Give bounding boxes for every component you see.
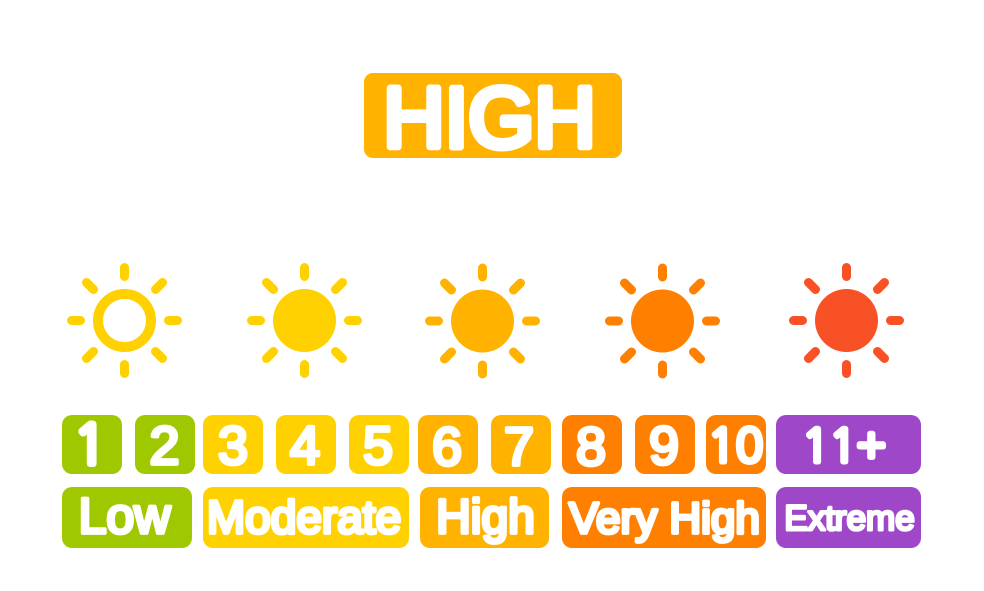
category label: High: High: [436, 491, 535, 544]
index tile 7: 7: [504, 417, 534, 477]
index tile 3: 3: [218, 416, 248, 476]
index tile 6: 6: [432, 417, 462, 477]
index tile 2: 2: [149, 416, 180, 476]
index tile 4: 4: [290, 416, 320, 476]
category label: Very High: Very High: [569, 494, 760, 543]
icon: moderate sun: [252, 268, 358, 374]
index tile 9: 9: [649, 416, 679, 476]
index tile 11+: [776, 415, 921, 474]
category label: High: [420, 487, 549, 548]
index tile 3: [203, 415, 263, 476]
index tile 1: 1: [74, 418, 106, 472]
category label: Extreme: [776, 487, 921, 548]
index tile 5: 5: [363, 416, 393, 476]
icon: very high sun: [610, 268, 716, 374]
index tile 10: 10: [708, 423, 763, 469]
current level badge: HIGH: HIGH: [383, 71, 596, 166]
icon: high sun: [430, 268, 536, 374]
icon: low sun (outlined): [72, 268, 178, 374]
category label: Low: Low: [79, 488, 171, 544]
index tile 7: [491, 415, 551, 477]
index tile 4: [276, 415, 336, 476]
index tile 8: [562, 415, 622, 477]
icon: extreme sun: [794, 268, 900, 374]
index tile 1: [62, 415, 122, 474]
index tile 6: [418, 415, 478, 477]
category label: Moderate: Moderate: [207, 491, 401, 543]
category label: Extreme: Extreme: [784, 499, 915, 538]
index tile 9: [635, 415, 695, 476]
index tile 8: 8: [576, 417, 606, 477]
index tile 5: [349, 415, 409, 476]
index tile 2: [135, 415, 195, 476]
category label: Low: [62, 487, 192, 548]
index tile 11+: 11+: [802, 424, 886, 469]
